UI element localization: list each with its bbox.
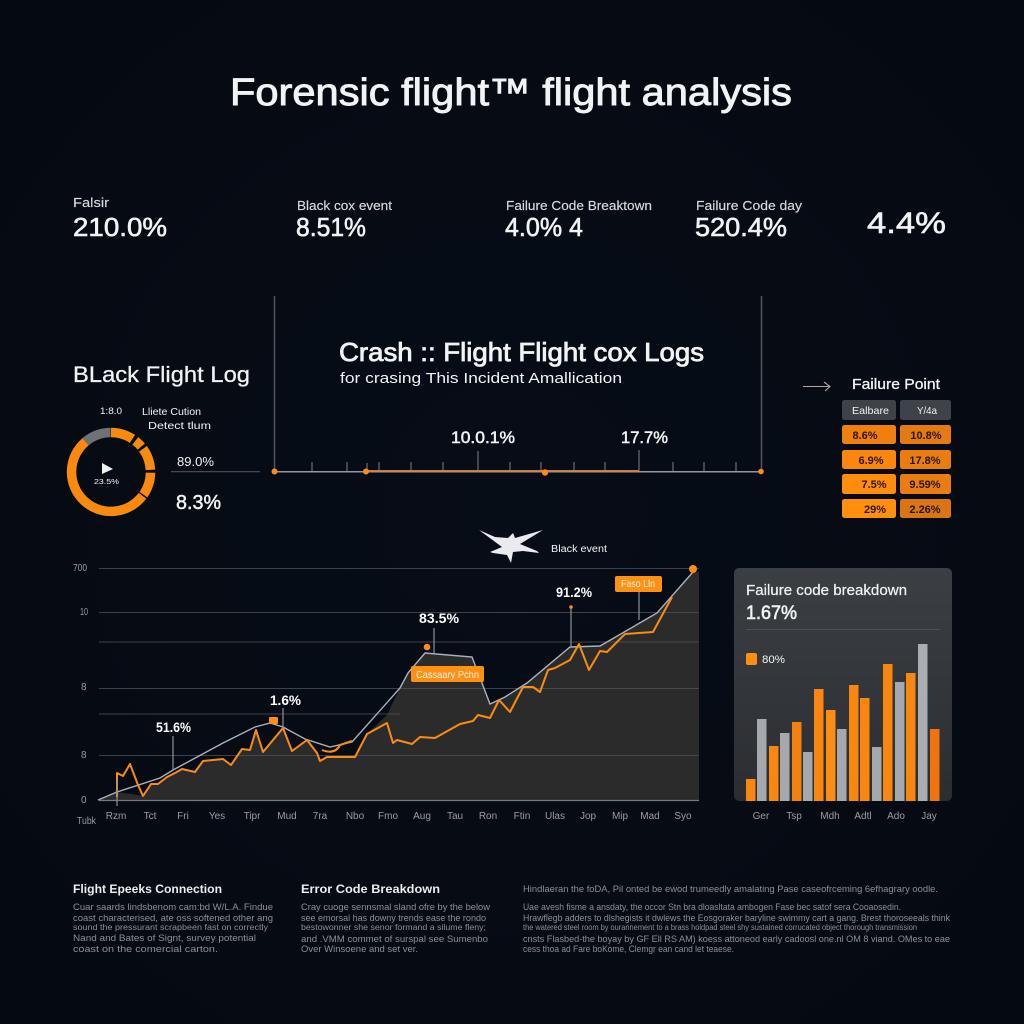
x axis labels: Yes bbox=[209, 811, 225, 822]
text block: methodology notes: Hindlaeran the foDA, Pil onted be ewod trumeedly amalating Pase caseofrceming 6efhagrary oodle. bbox=[523, 884, 938, 895]
stat: 89.0%: 89.0% bbox=[177, 455, 214, 469]
donut labels: 1:8.0 bbox=[100, 406, 122, 416]
x axis labels: Jop bbox=[580, 811, 596, 822]
text block: error code breakdown bbox=[301, 884, 490, 955]
panel: failure code breakdown bbox=[734, 568, 952, 822]
bar chart x labels: Jay bbox=[921, 811, 937, 822]
callout tag: cassary pchn: Cassaary Pchn bbox=[416, 670, 479, 681]
x axis labels: Mad bbox=[640, 811, 660, 822]
KPI: failure code day bbox=[695, 198, 803, 242]
timeline value: 17.7%: 17.7% bbox=[621, 428, 668, 447]
orange series line bbox=[117, 597, 672, 797]
line chart bbox=[73, 563, 699, 827]
table row 4: 29% bbox=[864, 504, 886, 516]
x axis labels: Ron bbox=[479, 811, 497, 822]
text block: error code breakdown: and .VMM commet of surspal see Sumenbo bbox=[301, 934, 488, 945]
heading: failure point: Failure Point bbox=[852, 376, 941, 393]
bar chart x labels: Tsp bbox=[786, 811, 802, 822]
title: Forensic flight™ flight analysis bbox=[230, 72, 792, 114]
x axis labels bbox=[106, 811, 692, 822]
callout tag: faso lln: Faso Lln bbox=[621, 579, 655, 590]
text block: methodology notes: cess thoa ad Fare boKome, Clemgr ean cand let teaese. bbox=[523, 944, 734, 955]
area fill bbox=[98, 572, 699, 800]
text block: flight effects connection: Nand and Bates of Signt, survey potential bbox=[73, 933, 256, 944]
x axis labels: Nbo bbox=[346, 811, 365, 822]
KPI: black box event: Black cox event bbox=[297, 198, 392, 213]
text block: flight effects connection: Cuar saards lindsbenom cam:bd W/L.A. Findue bbox=[73, 902, 273, 913]
label: black event: Black event bbox=[551, 544, 607, 555]
table row 3: 9.59% bbox=[909, 479, 941, 491]
heading: crash logs: Crash :: Flight Flight cox Logs bbox=[339, 337, 704, 367]
y axis labels: 8 bbox=[81, 682, 87, 693]
icon: airplane bbox=[479, 530, 543, 563]
x axis labels: Ulas bbox=[545, 811, 565, 822]
text block: error code breakdown: Cray cuoge sennsmal sland ofre by the below bbox=[301, 902, 490, 913]
KPI: failure code day: Failure Code day bbox=[696, 198, 803, 213]
donut centre value: 23.5% bbox=[94, 479, 119, 486]
bar chart x labels bbox=[753, 811, 937, 822]
panel heading: Failure code breakdown bbox=[746, 582, 907, 599]
bar chart x labels: Mdh bbox=[820, 811, 840, 822]
text block: flight effects connection: coast on the comercial carton. bbox=[73, 944, 218, 955]
legend: 80% bbox=[762, 654, 785, 666]
donut labels: Lliete Cution bbox=[142, 406, 201, 418]
marker points bbox=[269, 565, 697, 724]
callout tag: cassary pchn bbox=[411, 666, 484, 682]
table row 2: 6.9% bbox=[858, 455, 884, 467]
donut labels bbox=[100, 406, 211, 432]
text block: error code breakdown: Over Winsoene and set ver. bbox=[301, 944, 418, 955]
panel value: 1.67% bbox=[746, 603, 797, 624]
KPI: black box event bbox=[296, 198, 392, 242]
text block: methodology notes: Hrawflegb adders to dlshegists it dwlews the Eosgoraker baryline swimmy cart a gang. Brest thoroseeals think bbox=[523, 913, 950, 924]
table row 2: 17.8% bbox=[909, 455, 941, 467]
bar chart bbox=[746, 644, 940, 801]
text block: flight effects connection bbox=[73, 884, 273, 955]
table row 4: 2.26% bbox=[909, 504, 941, 516]
grid lines bbox=[99, 568, 699, 756]
y axis labels: 10 bbox=[80, 607, 88, 618]
subheading: for crasing This Incident Amallication bbox=[340, 370, 622, 387]
baseline bbox=[99, 800, 699, 802]
timeline axis bbox=[272, 296, 764, 476]
callout tag: faso lln bbox=[615, 576, 662, 592]
arrow bbox=[803, 382, 830, 391]
table header bbox=[842, 400, 951, 420]
donut chart bbox=[72, 432, 150, 511]
y axis labels bbox=[73, 563, 97, 827]
x axis labels: Rzm bbox=[106, 811, 126, 822]
text block: error code breakdown: Error Code Breakdown bbox=[301, 884, 440, 896]
y axis labels: 0 bbox=[81, 795, 87, 806]
text block: methodology notes: the watered steel room by ourannement to a brass holdpad steel shy sustained corrucated object thorough transmission bbox=[523, 923, 917, 932]
text block: flight effects connection: Flight Epeeks Connection bbox=[73, 884, 222, 896]
table row 2 bbox=[842, 450, 951, 469]
table row 1: 8.6% bbox=[852, 430, 878, 442]
KPI: falsir: 210.0% bbox=[73, 212, 167, 242]
y axis labels: 8 bbox=[81, 750, 87, 761]
y axis labels: 700 bbox=[73, 563, 87, 574]
table row 3 bbox=[842, 474, 951, 494]
bar chart x labels: Ado bbox=[887, 811, 905, 822]
callout: 1.6%: 1.6% bbox=[270, 692, 302, 708]
panel: failure point table bbox=[803, 376, 951, 518]
heading: black flight log: BLack Flight Log bbox=[73, 362, 250, 387]
grey series line bbox=[98, 572, 693, 800]
x axis labels: Tipr bbox=[244, 811, 261, 822]
stat: 8.3%: 8.3% bbox=[176, 492, 221, 514]
x axis labels: 7ra bbox=[313, 811, 328, 822]
KPI: standalone value: 4.4% bbox=[867, 207, 946, 240]
table header: Ealbare bbox=[852, 405, 889, 417]
KPI: falsir: Falsir bbox=[73, 195, 110, 210]
timeline value: 10.0.1%: 10.0.1% bbox=[451, 428, 515, 447]
text block: error code breakdown: see emorsal has downy trends ease the rondo bbox=[301, 913, 486, 924]
table row 1 bbox=[842, 425, 951, 444]
panel: black flight log bbox=[72, 362, 260, 514]
leader lines bbox=[117, 592, 639, 806]
x axis labels: Aug bbox=[413, 811, 431, 822]
text block: methodology notes: cnsts Flasbed-the boyay by GF Ell RS AM) koess attoneod early cadoosl one.nl OM 8 viand. OMes to eae bbox=[523, 934, 950, 945]
x axis labels: Mud bbox=[277, 811, 297, 822]
donut labels: Detect tlum bbox=[148, 420, 211, 432]
y axis labels: Tubk bbox=[77, 816, 97, 827]
panel: crash timeline bbox=[272, 296, 764, 476]
x axis labels: Fmo bbox=[378, 811, 398, 822]
text block: flight effects connection: sound the pressurant scrapbeen fast on correctly bbox=[73, 923, 268, 932]
callout: 51.6%: 51.6% bbox=[156, 719, 191, 735]
table header: Y/4a bbox=[917, 405, 937, 417]
x axis labels: Syo bbox=[674, 811, 692, 822]
KPI: failure code day: 520.4% bbox=[695, 212, 787, 242]
text block: methodology notes bbox=[523, 884, 950, 955]
x axis labels: Tau bbox=[447, 811, 463, 822]
x axis labels: Tct bbox=[144, 811, 157, 822]
x axis labels: Ftin bbox=[514, 811, 530, 822]
text block: error code breakdown: bestowonner she senor formand a silume fleny; bbox=[301, 923, 486, 932]
KPI: failure code breakdown bbox=[505, 198, 652, 242]
icon: play triangle bbox=[102, 463, 113, 474]
KPI: failure code breakdown: Failure Code Breaktown bbox=[506, 198, 652, 213]
text block: methodology notes: Uae avesh fisme a ansdaty, the occor Stn bra dloasltata ambogen Fase bec satof sera Cooaosedin. bbox=[523, 902, 901, 913]
bar chart x labels: Adtl bbox=[854, 811, 872, 822]
legend bbox=[746, 653, 785, 666]
x axis labels: Mip bbox=[612, 811, 628, 822]
text block: flight effects connection: coast characterised, ate oss softened other ang bbox=[73, 913, 273, 924]
x axis labels: Fri bbox=[177, 811, 189, 822]
table row 3: 7.5% bbox=[861, 479, 887, 491]
table row 4 bbox=[842, 499, 951, 518]
KPI: failure code breakdown: 4.0% 4 bbox=[505, 212, 583, 242]
bar chart x labels: Ger bbox=[753, 811, 770, 822]
KPI: black box event: 8.51% bbox=[296, 212, 366, 242]
KPI row bbox=[73, 195, 946, 242]
table row 1: 10.8% bbox=[910, 430, 942, 442]
panel background bbox=[734, 568, 952, 801]
callout: 83.5%: 83.5% bbox=[419, 610, 460, 626]
callout: 91.2%: 91.2% bbox=[556, 584, 592, 600]
KPI: falsir bbox=[73, 195, 167, 242]
